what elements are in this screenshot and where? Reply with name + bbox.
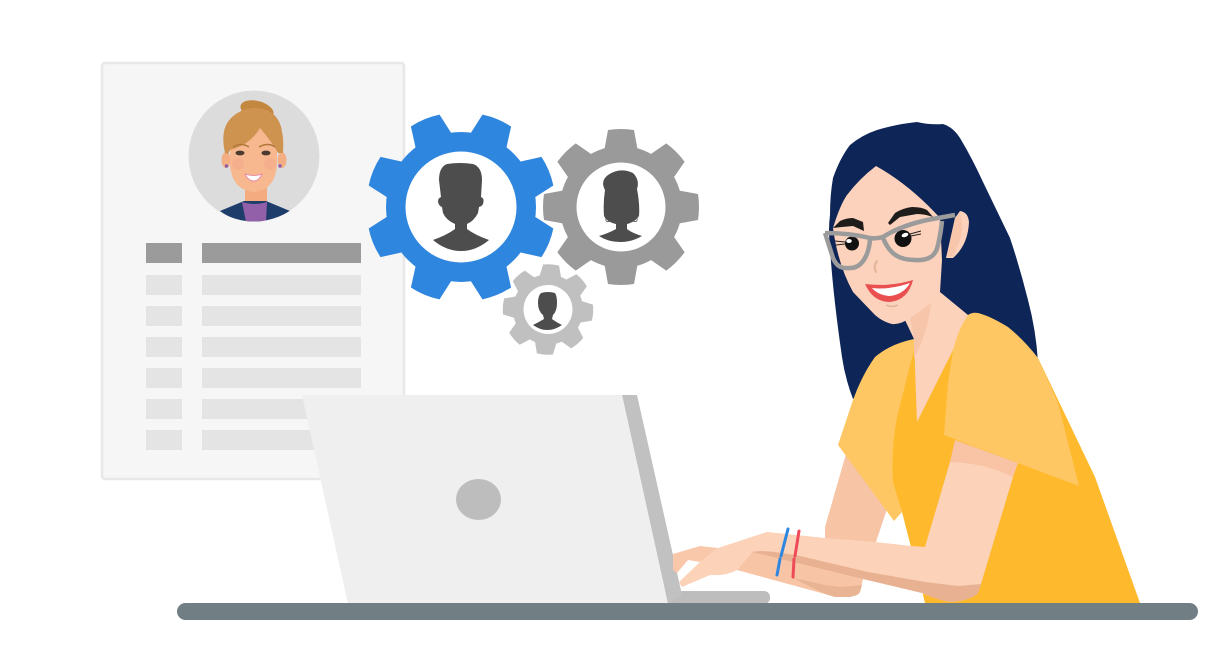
icon: large blue gear with man silhouette bbox=[366, 112, 556, 302]
hair bbox=[829, 122, 1038, 399]
mouth bbox=[865, 280, 913, 302]
bracelets bbox=[777, 529, 799, 577]
table bbox=[177, 603, 1198, 620]
character: woman typing bbox=[673, 122, 1140, 603]
front arm bbox=[679, 440, 1018, 602]
illustration: recruiter with laptop, resume and gears bbox=[100, 62, 1198, 620]
laptop logo bbox=[456, 479, 501, 520]
nose bbox=[875, 261, 877, 272]
neck shadow bbox=[910, 303, 931, 358]
table rows bbox=[146, 275, 361, 450]
face bbox=[833, 166, 942, 324]
icon: small light grey gear with man silhouette bbox=[500, 261, 596, 358]
table header bbox=[146, 243, 361, 263]
laptop lid side bbox=[622, 395, 682, 604]
back arm bbox=[673, 447, 895, 597]
glasses bbox=[825, 215, 955, 268]
ear bbox=[946, 211, 969, 258]
top body bbox=[890, 315, 1140, 603]
neck and chest bbox=[905, 292, 968, 422]
eyebrows bbox=[833, 207, 933, 231]
laptop lid bbox=[302, 395, 668, 604]
right flap sleeve bbox=[944, 313, 1079, 486]
left sleeve bbox=[838, 339, 914, 521]
laptop base bbox=[660, 591, 770, 604]
avatar: candidate portrait bbox=[188, 90, 320, 222]
laptop bbox=[302, 395, 770, 604]
icon: medium grey gear with woman silhouette bbox=[543, 129, 699, 285]
eyes bbox=[835, 230, 921, 250]
panel: resume document bbox=[102, 63, 404, 479]
